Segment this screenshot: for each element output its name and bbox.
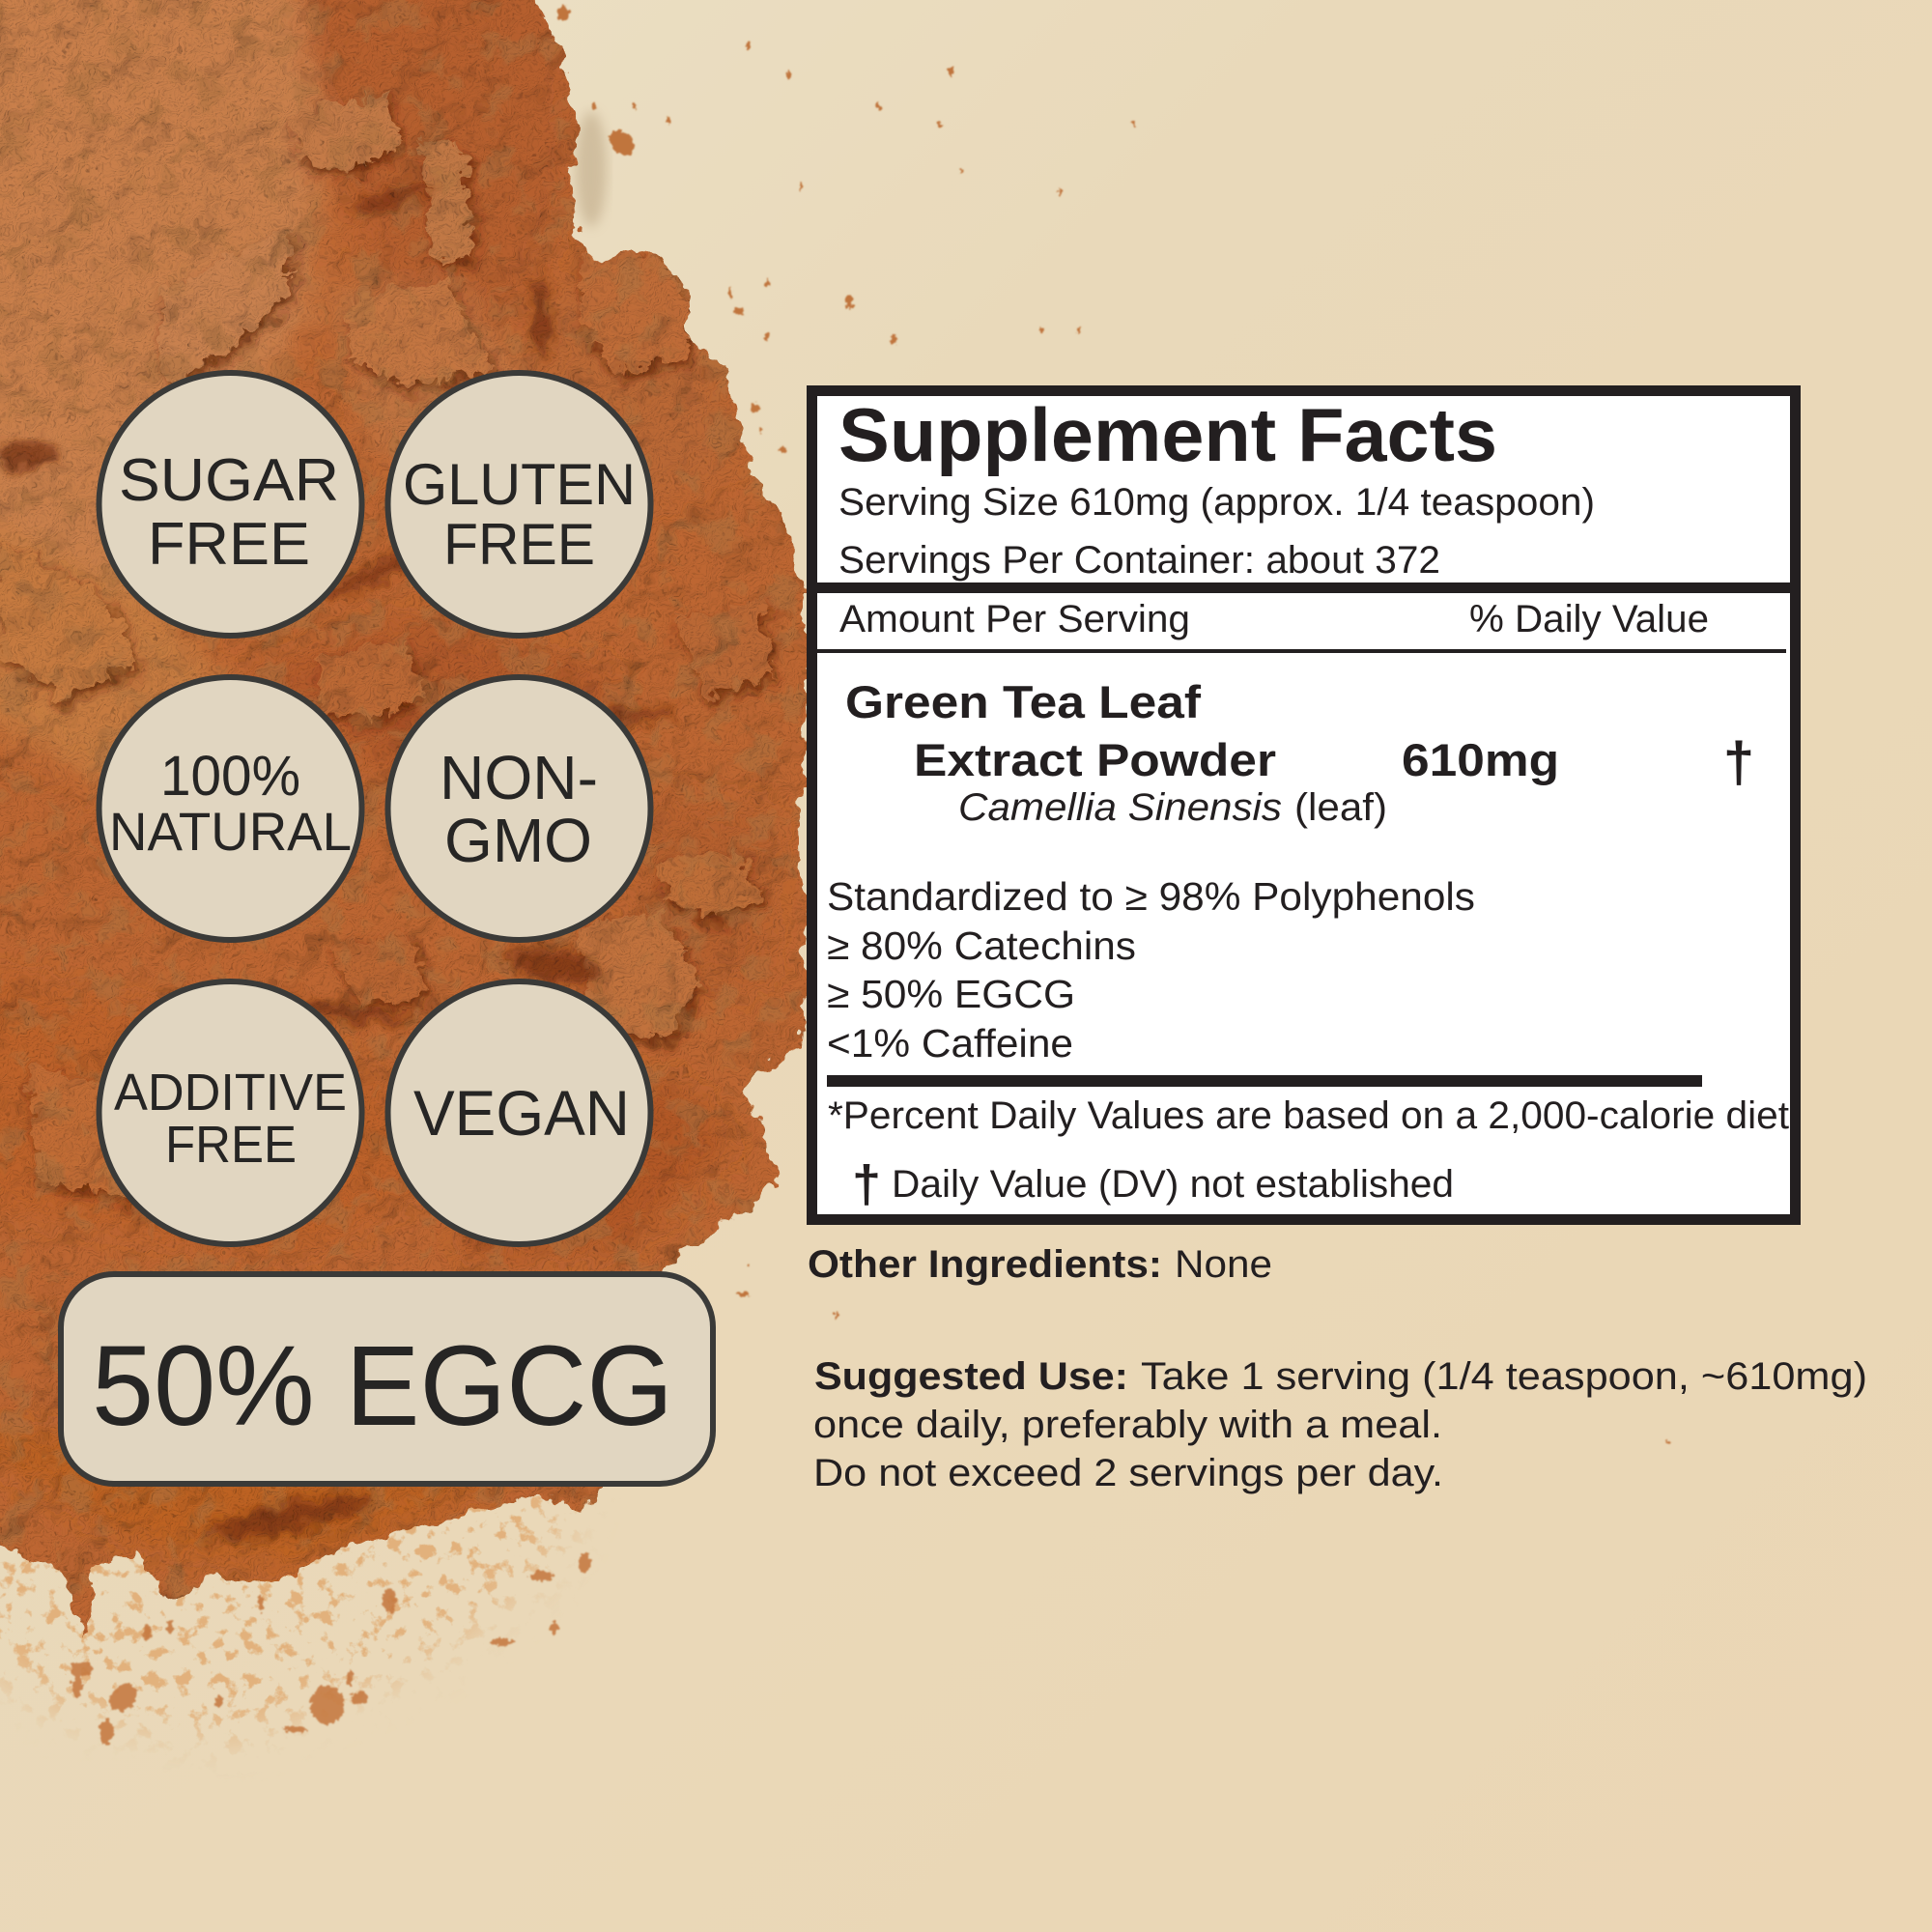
badge: vegan: VEGAN [413, 1077, 630, 1149]
dagger: † [1723, 731, 1754, 794]
badge: additive free: ADDITIVE [114, 1064, 347, 1122]
badge: 100% natural [99, 677, 361, 940]
badge: 50% egcg [61, 1274, 713, 1484]
dagger note: Daily Value (DV) not established [892, 1163, 1454, 1206]
standardization list: ≥ 80% Catechins [827, 923, 1136, 968]
suggested use: once daily, preferably with a meal. [813, 1404, 1442, 1446]
badge: sugar free: FREE [148, 511, 310, 578]
standardization list: <1% Caffeine [827, 1021, 1073, 1065]
botanical name: Camellia Sinensis [958, 786, 1282, 829]
suggested use: Do not exceed 2 servings per day. [813, 1452, 1443, 1494]
suggested use [813, 1355, 1867, 1494]
percent daily values note: *Percent Daily Values are based on a 2,000-calorie diet [828, 1094, 1789, 1137]
title: Supplement Facts [838, 392, 1497, 477]
standardization list: ≥ 50% EGCG [827, 972, 1075, 1016]
dagger note [852, 1155, 1454, 1213]
dusting below pile [0, 1495, 589, 1758]
pile shadow [576, 111, 607, 227]
badge: sugar free: SUGAR [119, 447, 339, 514]
heavy rule [827, 1075, 1702, 1087]
ingredient name line 2: Extract Powder [914, 734, 1276, 785]
standardization list [827, 874, 1475, 1065]
bottom powder dribbles [70, 1552, 590, 1746]
badge: additive free: FREE [165, 1116, 297, 1174]
column header: daily value: % Daily Value [1469, 598, 1709, 640]
ingredient amount: 610mg [1402, 734, 1559, 785]
standardization list: Standardized to ≥ 98% Polyphenols [827, 874, 1475, 919]
badge: 100% natural: 100% [160, 745, 300, 808]
other ingredients: None [1175, 1243, 1272, 1286]
badge: additive free [99, 981, 361, 1244]
scattered powder specks [557, 5, 1670, 1444]
badge: non-gmo: NON- [440, 743, 598, 812]
powder chunks [0, 92, 773, 1198]
suggested use: Suggested Use: [814, 1355, 1128, 1398]
other ingredients: Other Ingredients: [808, 1243, 1162, 1286]
badge: gluten free: FREE [443, 512, 595, 577]
dagger note: † [852, 1155, 881, 1213]
thin divider [817, 649, 1786, 653]
badge: 50% egcg: 50% EGCG [92, 1322, 673, 1450]
badge: gluten free: GLUTEN [403, 452, 636, 517]
badge: 100% natural: NATURAL [109, 801, 352, 862]
panel: supplement facts [811, 390, 1795, 1219]
thick divider [817, 582, 1791, 593]
badge: gluten free [388, 373, 651, 636]
suggested use: Take 1 serving (1/4 teaspoon, ~610mg) [1141, 1355, 1867, 1398]
panel frame [811, 390, 1795, 1219]
dark crevices [0, 0, 806, 1598]
column header: amount: Amount Per Serving [839, 598, 1190, 640]
badge: non-gmo: GMO [444, 806, 592, 875]
ingredient name line 1: Green Tea Leaf [845, 676, 1201, 727]
plant part: (leaf) [1294, 786, 1387, 829]
servings per container: Servings Per Container: about 372 [838, 539, 1440, 582]
badge: non-gmo [388, 677, 651, 940]
badge: vegan [388, 981, 651, 1244]
badge: sugar free [99, 373, 361, 636]
serving size: Serving Size 610mg (approx. 1/4 teaspoon) [838, 481, 1595, 524]
